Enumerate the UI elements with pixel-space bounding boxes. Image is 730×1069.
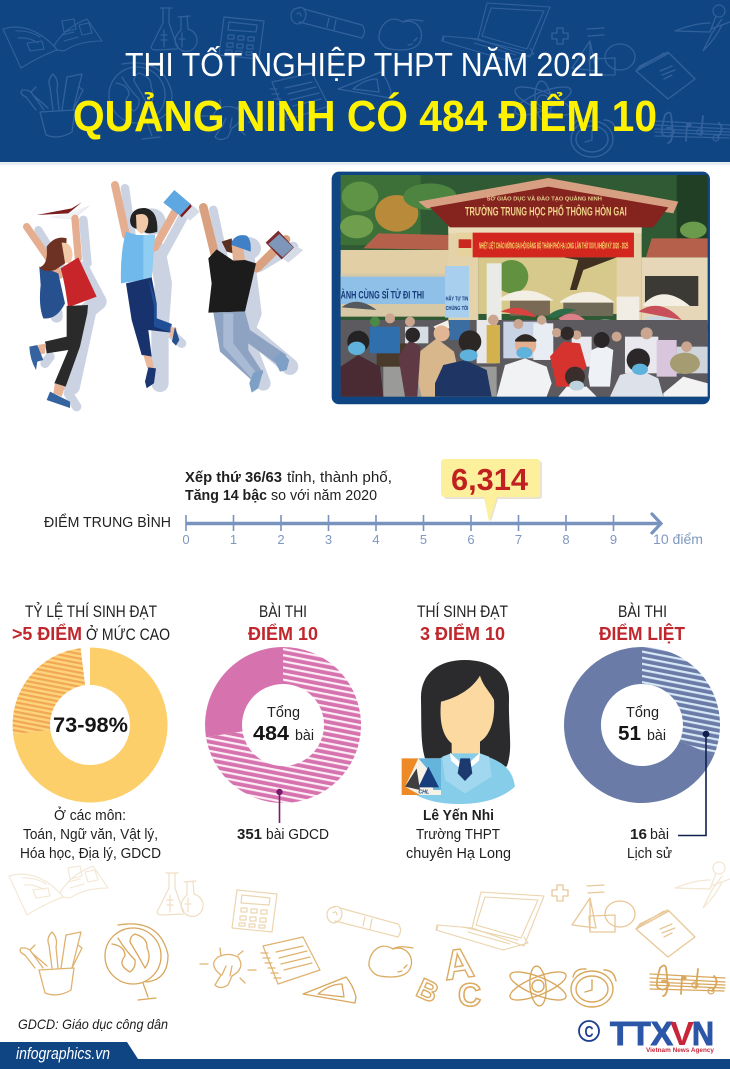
gate pillars and beam	[448, 227, 478, 322]
donut chart: 484 papers: Tổng	[267, 704, 300, 721]
column heading: ĐIỂM LIỆT	[599, 623, 685, 644]
axis label: ĐIỂM TRUNG BÌNH	[44, 513, 171, 531]
photo: Hon Gai high school gate with crowd of students	[332, 172, 710, 404]
subjects note: Toán, Ngữ văn, Vật lý,	[23, 827, 158, 843]
axis numbers: 6	[467, 532, 475, 547]
logo: TTXVN Vietnam News Agency: Vietnam News Agency	[646, 1047, 714, 1054]
student 3: black shirt with blue cap	[203, 207, 294, 393]
blue banners: CHÚNG TÔI	[446, 304, 469, 312]
number line: average score	[44, 459, 703, 547]
blue banners: HÃY TỰ TIN	[446, 296, 468, 303]
subjects note: Ở các môn:	[54, 806, 126, 824]
portrait: Le Yen Nhi	[402, 660, 515, 804]
logo: TTXVN Vietnam News Agency: TTX	[610, 1015, 673, 1052]
footer school doodles: B	[412, 972, 443, 1009]
student shadows	[38, 188, 293, 407]
footer school doodles	[9, 862, 730, 1013]
donut chart: 484 papers: 484	[253, 723, 290, 745]
callout: civic education papers	[237, 789, 329, 843]
axis numbers	[182, 532, 617, 547]
footer school doodles: A	[440, 938, 477, 989]
subjects note	[20, 806, 161, 862]
column heading	[12, 602, 170, 644]
column 4: failing-score papers	[564, 602, 720, 862]
column heading: THÍ SINH ĐẠT	[417, 602, 508, 621]
axis numbers: 3	[325, 532, 332, 547]
column heading	[417, 602, 508, 644]
footer school doodles: C	[458, 977, 481, 1013]
copyright mark: C	[584, 1024, 594, 1041]
column 1: share of candidates above 5 points	[12, 602, 170, 862]
ranking note: Tăng 14 bậc	[185, 488, 267, 504]
axis numbers: 5	[420, 532, 427, 547]
trees and greenery	[340, 175, 708, 245]
header background school doodles	[3, 3, 730, 157]
axis numbers: 9	[610, 532, 617, 547]
student name and school: Lê Yến Nhi	[423, 808, 494, 824]
column heading: TỶ LỆ THÍ SINH ĐẠT	[25, 602, 157, 621]
column 2: 10-point papers	[205, 602, 361, 843]
photo frame	[332, 172, 710, 404]
foreground students	[341, 320, 708, 397]
terracotta roofs	[363, 233, 449, 250]
donut chart: 73-98%	[13, 648, 168, 802]
donut chart: 51 papers: 51	[618, 723, 641, 745]
donut chart: 73-98%: 73-98%	[53, 714, 128, 737]
donut chart: 51 papers: Tổng	[626, 704, 659, 721]
school logo	[402, 758, 441, 795]
title line 1: THI TỐT NGHIỆP THPT NĂM 2021	[125, 45, 604, 83]
axis numbers: 0	[182, 532, 190, 547]
subjects note: Hóa học, Địa lý, GDCD	[20, 846, 161, 862]
callout: civic education papers: bài GDCD	[266, 827, 329, 843]
donut chart: 51 papers: bài	[647, 727, 666, 744]
crowd background	[341, 313, 708, 397]
column heading: >5 ĐIỂM	[12, 623, 82, 644]
donut chart: 484 papers: bài	[295, 727, 314, 744]
side buildings	[341, 250, 449, 277]
axis numbers: 7	[515, 532, 522, 547]
column heading: BÀI THI	[618, 602, 667, 621]
axis numbers: 2	[277, 532, 285, 547]
umbrellas	[342, 291, 708, 347]
red banner	[457, 233, 634, 257]
axis numbers: 1	[230, 532, 237, 547]
callout: 6,314: 6,314	[451, 462, 529, 497]
callout: 6,314	[441, 459, 542, 522]
column heading: 3 ĐIỂM 10	[420, 623, 505, 644]
logo: TTXVN Vietnam News Agency: N	[692, 1015, 714, 1052]
column heading	[248, 602, 318, 644]
callout: history papers: bài	[650, 827, 669, 843]
gate roof sign: TRƯỜNG TRUNG HỌC PHỔ THÔNG HÒN GAI	[465, 204, 627, 219]
student name and school	[406, 808, 511, 862]
blue banners: ÀNH CÙNG SĨ TỬ ĐI THI	[341, 288, 424, 301]
column heading: ĐIỂM 10	[248, 623, 318, 644]
logo: TTXVN Vietnam News Agency	[579, 1015, 714, 1054]
callout: history papers: 16	[630, 827, 647, 843]
callout: history papers: Lịch sử	[627, 846, 672, 862]
ranking note	[185, 470, 392, 504]
footer bar with site name	[0, 1042, 730, 1069]
ranking note: tỉnh, thành phố,	[287, 470, 392, 486]
ranking note: so với năm 2020	[271, 488, 377, 504]
student name and school: chuyên Hạ Long	[406, 846, 511, 862]
student 2: light blue shirt	[115, 185, 192, 388]
title line 2: QUẢNG NINH CÓ 484 ĐIỂM 10	[73, 90, 657, 141]
donut chart: 484 papers	[205, 647, 361, 803]
school logo: CHL	[418, 789, 429, 795]
ranking note: Xếp thứ 36/63	[185, 470, 282, 486]
axis end label: 10 điểm	[653, 531, 703, 547]
axis with ticks and arrow	[186, 514, 661, 533]
footnote: GDCD: Giáo dục công dân	[18, 1016, 168, 1032]
illustration: three jumping students	[27, 185, 303, 408]
donut chart: 51 papers	[564, 647, 720, 803]
callout: civic education papers: 351	[237, 827, 262, 843]
column heading: Ở MỨC CAO	[86, 625, 170, 644]
blue banners	[341, 266, 469, 318]
gate roof sign: SỞ GIÁO DỤC VÀ ĐÀO TẠO QUẢNG NINH	[487, 196, 602, 203]
student 1: red shirt with backpack	[27, 202, 97, 408]
column heading	[599, 602, 685, 644]
footer bar with site name: infographics.vn	[16, 1044, 110, 1063]
axis numbers: 4	[372, 532, 380, 547]
header banner	[0, 0, 730, 165]
logo: TTXVN Vietnam News Agency: V	[670, 1015, 694, 1052]
axis numbers: 8	[562, 532, 570, 547]
column heading: BÀI THI	[259, 602, 307, 621]
gate roof sign	[418, 178, 678, 227]
callout: history papers	[627, 731, 709, 862]
student name and school: Trường THPT	[416, 827, 500, 843]
column 3: student with three 10s	[402, 602, 515, 862]
